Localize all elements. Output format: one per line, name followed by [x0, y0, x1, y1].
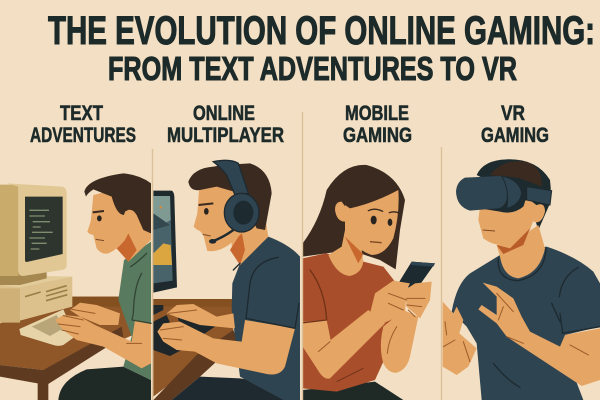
label: online multiplayer [167, 102, 284, 147]
desk [153, 299, 238, 400]
icon: retro computer [0, 183, 72, 323]
desk [0, 297, 151, 400]
icon: gaming monitor [153, 191, 177, 293]
label: online multiplayer: MULTIPLAYER [167, 124, 284, 147]
label: text adventures: TEXT [60, 102, 103, 125]
label: vr gaming: VR [501, 102, 525, 125]
person [55, 173, 151, 400]
person [443, 159, 600, 400]
icon: keyboard [19, 309, 75, 346]
person [157, 160, 300, 400]
panel: vr gaming illustration [443, 159, 600, 400]
panel: mobile gaming illustration [303, 165, 435, 400]
label: vr gaming [481, 102, 549, 147]
person [303, 165, 435, 400]
title [48, 9, 595, 87]
icon: vr headset [456, 176, 552, 213]
icon: keyboard and mouse [153, 305, 215, 356]
dividers [152, 112, 442, 400]
panel: online multiplayer illustration [153, 160, 300, 400]
label: mobile gaming: GAMING [343, 124, 412, 147]
hands [443, 283, 600, 386]
label: vr gaming: GAMING [481, 124, 549, 147]
icon: headset [209, 160, 259, 244]
label: mobile gaming [343, 102, 412, 147]
label: mobile gaming: MOBILE [345, 102, 409, 125]
label: online multiplayer: ONLINE [193, 102, 255, 125]
label: text adventures: ADVENTURES [30, 124, 136, 147]
panel: text adventures illustration [0, 173, 151, 400]
icon: smartphone [399, 262, 435, 292]
label: text adventures [30, 102, 136, 147]
